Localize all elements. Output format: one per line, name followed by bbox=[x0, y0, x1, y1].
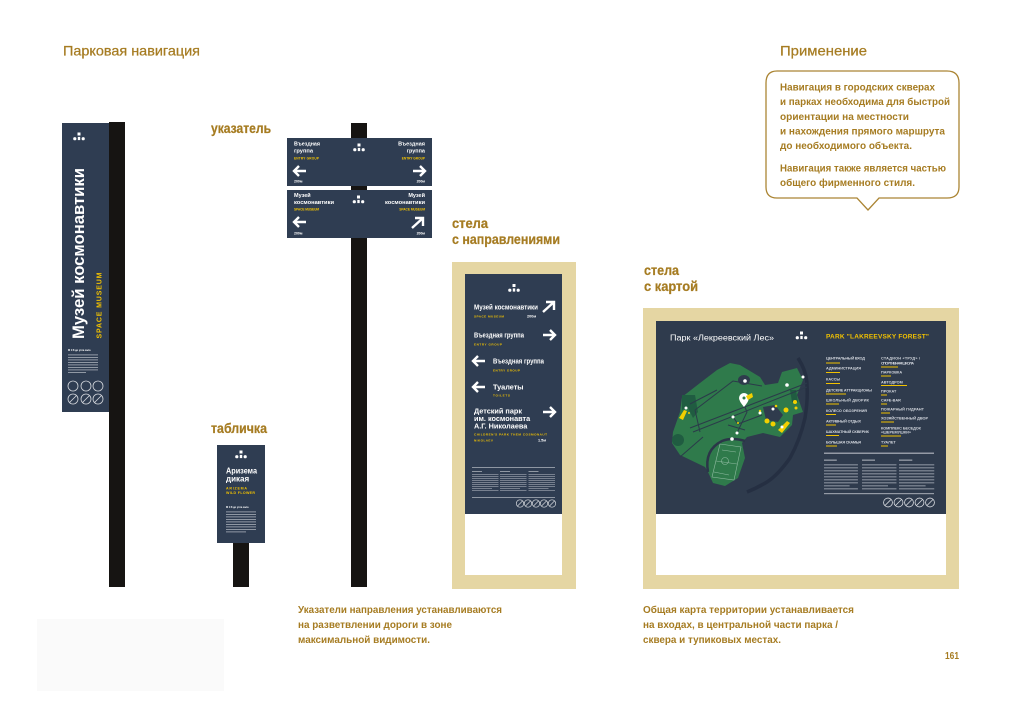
panel: stele with directions: 200м bbox=[527, 314, 536, 318]
label: stele with directions bbox=[452, 215, 560, 247]
panel: stele with directions: им. космонавта bbox=[474, 414, 531, 423]
panel: plaque: дикая bbox=[226, 474, 249, 484]
panel: pointer top: ENTRY GROUP bbox=[402, 156, 426, 160]
legend: left column: АДМИНИСТРАЦИЯ bbox=[826, 366, 861, 370]
panel: plaque: WILD FLOWER bbox=[226, 491, 255, 495]
panel: pointer top bbox=[287, 138, 432, 186]
panel: stele with directions: NIKOLAEV bbox=[474, 438, 494, 442]
panel: pointer top: 200м bbox=[417, 180, 425, 184]
legend: right column: «ШЕРЕМУШКИ» bbox=[881, 430, 911, 434]
caption: pointers: максимальной видимости. bbox=[298, 634, 430, 646]
callout: application text: Навигация также является частью bbox=[780, 162, 946, 174]
panel: pointer bottom: 200м bbox=[294, 232, 303, 236]
panel: stele with directions: Детский парк bbox=[474, 406, 522, 416]
panel: stele with directions bbox=[452, 262, 576, 589]
small description: М 1:8 до угла зала bbox=[68, 349, 91, 352]
panel: stele with directions: Въездная группа bbox=[474, 330, 525, 340]
panel: pointer bottom: SPACE MUSEUM bbox=[399, 208, 425, 212]
label: stele with map: с картой bbox=[644, 278, 698, 294]
callout: application text: ориентации на местности bbox=[780, 111, 909, 123]
arrow left bbox=[294, 217, 306, 227]
small description bbox=[68, 349, 98, 373]
caption: pointers bbox=[298, 604, 502, 646]
arrow left bbox=[294, 166, 306, 176]
info columns bbox=[824, 452, 934, 494]
legend: right column: АВТОДРОМ bbox=[881, 380, 903, 384]
panel: stele with map: PARK "LAKREEVSKY FOREST" bbox=[826, 334, 929, 340]
icon: park logo bbox=[73, 132, 85, 140]
panel: pointer bottom: Музей bbox=[294, 192, 311, 199]
legend: right column: СТАДИОН «ТРУД» / bbox=[881, 356, 921, 360]
callout: application text: и нахождения прямого маршрута bbox=[780, 126, 945, 138]
legend: left column: КАССЫ bbox=[826, 378, 840, 382]
vertical subtitle: SPACE MUSEUM bbox=[96, 272, 104, 338]
panel: pointer bottom: SPACE MUSEUM bbox=[294, 208, 319, 212]
label: stele with directions: с направлениями bbox=[452, 231, 560, 247]
panel: stele with directions: А.Г. Николаева bbox=[474, 422, 528, 430]
label: pointer: указатель bbox=[211, 120, 271, 136]
pole: pointer bbox=[351, 123, 367, 587]
panel: pointer bottom: космонавтики bbox=[385, 200, 425, 206]
legend: right column: КОМПЛЕКС БЕСЕДОК bbox=[881, 426, 922, 430]
legend: right column: ПАРКОВКА bbox=[881, 370, 902, 374]
pole: plaque bbox=[233, 543, 249, 587]
icons: rule circles bbox=[68, 381, 103, 404]
label: stele with map: стела bbox=[644, 262, 679, 278]
panel: stele with directions: SPACE MUSEUM bbox=[474, 314, 504, 318]
legend: right column: ХОЗЯЙСТВЕННЫЙ ДВОР bbox=[881, 416, 928, 420]
legend: right column bbox=[881, 356, 928, 446]
arrow right bbox=[413, 166, 425, 176]
panel: stele with map bbox=[643, 308, 959, 589]
panel: stele with directions: TOILETS bbox=[493, 394, 510, 398]
icon: logo bbox=[353, 144, 365, 151]
legend: right column: CAFE-BAR bbox=[881, 398, 901, 402]
panel: pointer bottom: 200м bbox=[417, 232, 425, 236]
heading: park navigation: Парковая навигация bbox=[63, 42, 200, 58]
panel: stele with directions: ENTRY GROUP bbox=[474, 342, 502, 346]
panel: pointer top: группа bbox=[294, 148, 314, 154]
icon: logo bbox=[353, 196, 364, 203]
panel: pointer bottom: Музей bbox=[408, 192, 425, 199]
label: stele with directions: стела bbox=[452, 215, 488, 231]
panel: pointer bottom bbox=[287, 190, 432, 238]
vertical title: Музей космонавтики bbox=[70, 168, 88, 339]
callout: application text: до необходимого объекта. bbox=[780, 140, 912, 152]
panel: stele with directions: Музей космонавтики bbox=[474, 302, 538, 312]
panel: pointer top: Въездная bbox=[294, 142, 320, 148]
panel: pointer top: ENTRY GROUP bbox=[294, 156, 320, 160]
legend: left column: ШАХМАТНЫЙ СКВЕРИК bbox=[826, 430, 870, 434]
chart: park map bbox=[672, 358, 807, 492]
legend: left column: ЦЕНТРАЛЬНЫЙ ВХОД bbox=[826, 356, 865, 360]
icons: rule circles bbox=[884, 498, 934, 507]
caption: map: на входах, в центральной части парка / bbox=[643, 619, 838, 631]
legend: left column: ДЕТСКИЕ АТТРАКЦИОНЫ bbox=[826, 388, 872, 392]
heading: application: Применение bbox=[780, 42, 867, 58]
legend: right column: ТУАЛЕТ bbox=[881, 440, 896, 444]
legend: left column: АКТИВНЫЙ ОТДЫХ bbox=[826, 420, 861, 424]
panel: stele with map: Парк «Лекреевский Лес» bbox=[670, 334, 774, 342]
label: stele with map bbox=[644, 262, 698, 294]
caption: pointers: на разветвлении дороги в зоне bbox=[298, 619, 452, 631]
label: plaque: табличка bbox=[211, 420, 267, 436]
faint footer patch bbox=[37, 619, 224, 691]
arrow up-right bbox=[412, 218, 423, 228]
panel: stele with directions: 1.5м bbox=[538, 438, 546, 442]
panel: stele with directions: Въездная группа bbox=[493, 356, 545, 366]
pole: museum sign bbox=[109, 122, 125, 587]
panel: pointer top: 200м bbox=[294, 180, 303, 184]
panel: pointer bottom: космонавтики bbox=[294, 200, 334, 206]
callout: application text bbox=[766, 71, 959, 210]
legend: right column: СПОРТИВНАЯ ШКОЛА bbox=[881, 362, 914, 366]
panel: stele with directions: ENTRY GROUP bbox=[493, 368, 520, 372]
panel: plaque: Аризема bbox=[226, 466, 257, 476]
callout: application text: и парках необходима для быстрой bbox=[780, 96, 950, 108]
caption: pointers: Указатели направления устанавливаются bbox=[298, 604, 502, 616]
page number: 161 bbox=[945, 650, 959, 662]
legend: left column: КОЛЕСО ОБОЗРЕНИЯ bbox=[826, 409, 867, 413]
panel: plaque bbox=[217, 445, 265, 543]
stadium field bbox=[712, 444, 741, 480]
panel: vertical museum sign bbox=[62, 123, 109, 412]
panel: plaque: М 1:8 до угла зала bbox=[226, 506, 249, 509]
legend: left column: БОЛЬШАЯ СКАМЬЯ bbox=[826, 440, 861, 444]
caption: map: Общая карта территории устанавливается bbox=[643, 604, 854, 616]
callout: application text: Навигация в городских скверах bbox=[780, 82, 935, 94]
legend: left column: ШКОЛЬНЫЙ ДВОРИК bbox=[826, 398, 870, 402]
legend: right column: ПОЖАРНЫЙ ГИДРАНТ bbox=[881, 408, 925, 412]
panel: pointer top: Въездная bbox=[398, 142, 425, 148]
caption: map: сквера и тупиковых местах. bbox=[643, 634, 781, 646]
caption: map bbox=[643, 604, 854, 646]
legend: left column bbox=[826, 356, 872, 446]
panel: pointer top: группа bbox=[407, 148, 426, 154]
panel: stele with directions: Туалеты bbox=[493, 382, 524, 392]
panel: stele with directions: CHILDREN'S PARK THEM COSMONAUT bbox=[474, 432, 547, 436]
panel: plaque: ARIZEMA bbox=[226, 486, 247, 490]
callout: application text: общего фирменного стиля. bbox=[780, 177, 915, 189]
legend: right column: ПРОКАТ bbox=[881, 390, 897, 394]
